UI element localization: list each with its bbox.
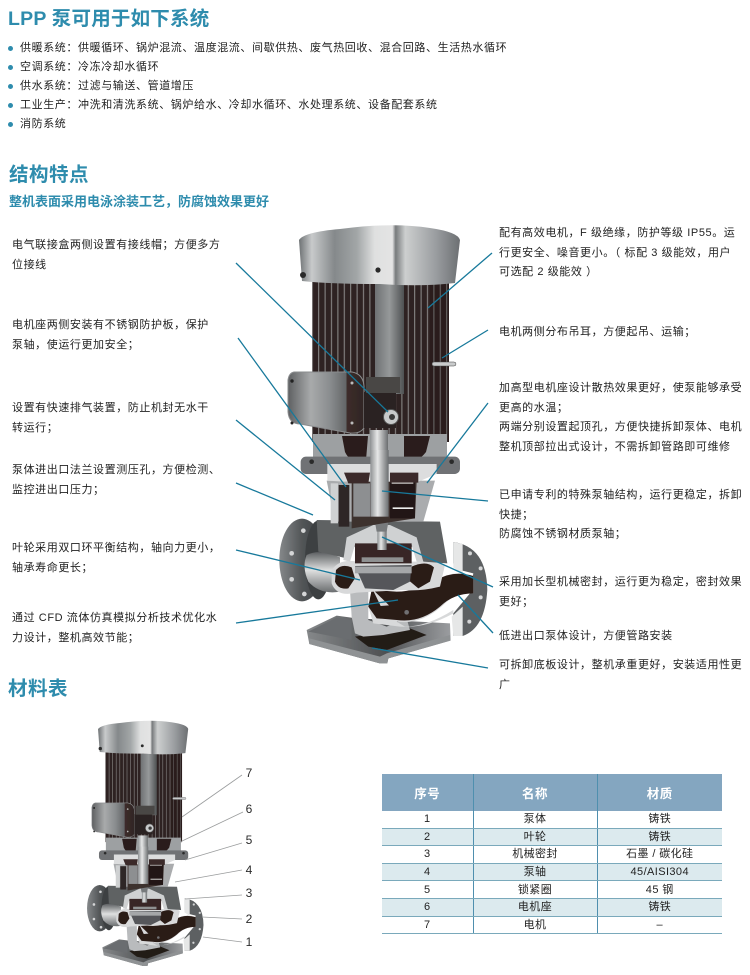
callout: motor seat: 整机顶部拉出式设计，不需拆卸管路即可维修 [499,440,731,452]
callout: guard: 电机座两侧安装有不锈钢防护板，保护 [12,319,209,331]
callout: base: 广 [499,678,511,690]
bullet list: systems [8,42,507,130]
callout: CFD [12,612,217,644]
material numbers: 7 [246,766,253,780]
table: materials: 锁紧圈 [518,884,552,896]
callout: motor: 可选配 2 级能效 ） [499,266,598,278]
callout: guard: 泵轴，使运行更加安全； [12,338,139,350]
callout: seal: 更好； [499,596,534,608]
bullet list: systems: 供暖系统：供暖循环、锅炉混流、温度混流、间歇供热、废气热回收、混合回路、生活热水循环 [20,42,507,54]
callout: shaft: 已申请专利的特殊泵轴结构，运行更稳定，拆卸 [499,489,742,501]
callout: CFD: 通过 CFD 流体仿真模拟分析技术优化水 [12,612,217,624]
callout: motor seat: 加高型电机座设计散热效果更好，使泵能够承受 [499,382,742,394]
table: materials: – [656,919,663,931]
leader lines: feature callouts [236,253,493,668]
callout: seal [499,576,742,608]
table: materials: 3 [424,848,431,860]
motor fan cover [299,225,460,285]
subheading: 整机表面采用电泳涂装工艺，防腐蚀效果更好 [9,194,269,209]
right outlet flange [453,542,487,636]
callout: impeller: 叶轮采用双口环平衡结构，轴向力更小， [12,542,220,554]
table: materials: 材质 [647,787,673,801]
callout: motor seat: 更高的水温； [499,402,568,414]
callout: motor: 行更安全、噪音更小。（ 标配 3 级能效，用户 [499,246,731,258]
material numbers: 2 [246,912,253,926]
title: applicable systems: LPP 泵可用于如下系统 [8,8,209,30]
table: materials: 45 钢 [646,884,674,896]
callout: inlet outlet: 低进出口泵体设计，方便管路安装 [499,630,673,642]
material numbers [246,766,253,949]
bullet list: systems: 工业生产：冲洗和清洗系统、锅炉给水、冷却水循环、水处理系统、设备配套系统 [20,99,438,111]
mounting base [307,616,451,663]
table: materials: 石墨 / 碳化硅 [626,848,693,860]
callout: impeller [12,542,220,574]
callout: shaft: 快捷； [499,508,534,520]
pump shaft [370,450,389,517]
table: materials: 叶轮 [524,831,546,843]
leader lines: material numbers [175,775,243,942]
heading: structure features: 结构特点 [9,164,89,186]
table: materials: 1 [424,813,431,825]
table: materials: 7 [424,919,431,931]
callout: CFD: 力设计，整机高效节能； [12,632,139,644]
table: materials: 电机座 [518,901,552,913]
pedestal wall [350,590,410,637]
callout: lifting lugs: 电机两侧分布吊耳，方便起吊、运输； [499,326,696,338]
pump lower body, drawn in crop coordinates [279,450,487,663]
illustration: main pump cutaway [279,225,487,663]
table: materials: 铸铁 [648,813,671,825]
callout: junction box: 位接线 [12,258,47,270]
bullet list: systems: 消防系统 [20,118,66,130]
lifting lug [432,362,456,366]
impeller [355,565,412,590]
table: materials: 4 [424,866,431,878]
callout: vent: 设置有快速排气装置，防止机封无水干 [12,402,209,414]
callout: base: 可拆卸底板设计，整机承重更好，安装适用性更 [499,659,742,671]
small pump for materials list [87,721,203,966]
bullet list: systems: 供水系统：过滤与输送、管道增压 [20,80,194,92]
table: materials: 45/AISI304 [631,866,689,878]
callout: motor seat [499,382,742,452]
callout: motor [499,226,735,278]
material numbers: 4 [246,863,253,877]
bullet list: systems: 空调系统：冷冻冷却水循环 [20,61,159,73]
left flange [279,519,325,601]
seat flange [301,457,460,474]
callout: shaft [499,488,742,540]
volute [332,561,445,594]
table: materials: 铸铁 [648,901,671,913]
material numbers: 1 [246,935,253,949]
table: materials: 名称 [522,787,548,801]
callout: guard [12,318,209,350]
callout: vent [12,402,209,434]
callout: pressure ports: 监控进出口压力； [12,484,105,496]
discharge passage [368,573,473,627]
callout: pressure ports [12,464,220,496]
table: materials: 电机 [524,919,546,931]
callout: seal: 采用加长型机械密封，运行更为稳定，密封效果 [499,576,742,588]
table: materials: 泵体 [524,813,546,825]
callout: impeller: 轴承寿命更长； [12,562,93,574]
table: materials: 序号 [414,787,440,801]
callout: junction box [12,238,220,270]
callout: shaft: 防腐蚀不锈钢材质泵轴； [499,528,626,540]
material numbers: 6 [246,802,253,816]
callout: motor seat: 两端分别设置起顶孔，方便快捷拆卸泵体、电机 [499,421,742,433]
table: materials: 机械密封 [512,848,558,860]
table: materials: 2 [424,831,431,843]
callout: vent: 转运行； [12,422,58,434]
motor seat upper [313,430,447,462]
table: materials: 5 [424,884,431,896]
upper pump casing [317,520,447,563]
material numbers: 5 [246,833,253,847]
motor body with cooling fins [312,280,449,442]
callout: pressure ports: 泵体进出口法兰设置测压孔，方便检测、 [12,464,220,476]
table: materials [382,774,722,934]
table: materials: 泵轴 [524,866,546,878]
callout: junction box: 电气联接盒两侧设置有接线帽；方便多方 [12,239,220,251]
callout: base [499,658,742,690]
heading: materials: 材料表 [8,678,68,700]
table: materials: 6 [424,901,431,913]
left inlet pipe [305,552,340,592]
motor seat cone [327,481,435,522]
material numbers: 3 [246,886,253,900]
junction box [288,372,400,433]
callout: motor: 配有高效电机，F 级绝缘，防护等级 IP55。运 [499,227,735,239]
table: materials: 铸铁 [648,831,671,843]
